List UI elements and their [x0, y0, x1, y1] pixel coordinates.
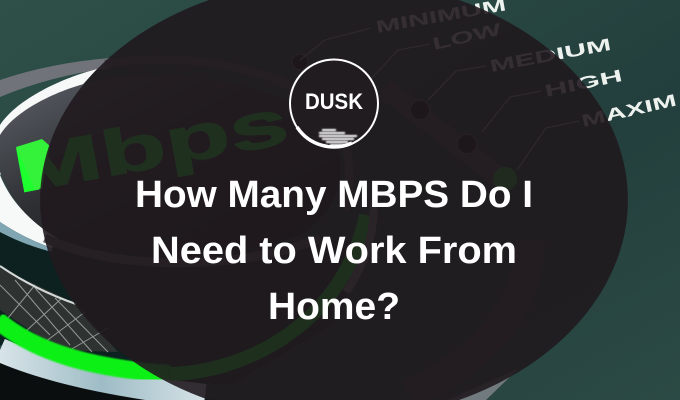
title: How Many MBPS Do I — [135, 174, 533, 216]
scale labels: LOW — [431, 19, 505, 54]
grey top band — [0, 58, 110, 97]
scale labels — [374, 0, 678, 131]
title — [135, 174, 533, 328]
green ring under overlay — [170, 215, 366, 374]
slider track — [385, 88, 500, 178]
silver base ring — [0, 350, 205, 396]
right grey ring under overlay — [346, 200, 374, 292]
title: Home? — [268, 286, 400, 328]
upper rim under overlay — [104, 60, 107, 62]
knob markers — [292, 54, 477, 154]
outer grey band lower right — [459, 377, 510, 400]
scale labels: MINIMUM — [374, 0, 508, 37]
mesh upper silver edge — [0, 266, 76, 304]
logo brush stroke — [319, 129, 357, 146]
scale labels: MEDIUM — [488, 35, 613, 76]
logo ring — [290, 60, 378, 148]
Mbps lettering: Mbps — [7, 85, 294, 207]
rim teal shadow — [0, 222, 52, 252]
lower rim under overlay — [43, 234, 60, 246]
mesh panel — [0, 268, 118, 352]
scale labels: HIGH — [543, 66, 624, 101]
green glow ring — [0, 320, 170, 374]
glass top of dial — [0, 84, 84, 228]
logo: DUSK badge — [290, 60, 378, 148]
mesh grid lines — [0, 280, 108, 352]
outer concentric arc under overlay — [410, 240, 530, 395]
logo wordmark: DUSK — [305, 89, 363, 114]
title: Need to Work From — [151, 230, 517, 272]
dial dark lower body — [0, 222, 133, 362]
bright M stem — [16, 139, 50, 190]
corner shadow — [0, 362, 220, 400]
silver rim — [0, 69, 97, 248]
leader lines — [300, 28, 579, 170]
scale labels: MAXIM — [580, 91, 678, 131]
green indicator — [493, 167, 517, 191]
logo ring heavier brush segment — [297, 127, 352, 147]
